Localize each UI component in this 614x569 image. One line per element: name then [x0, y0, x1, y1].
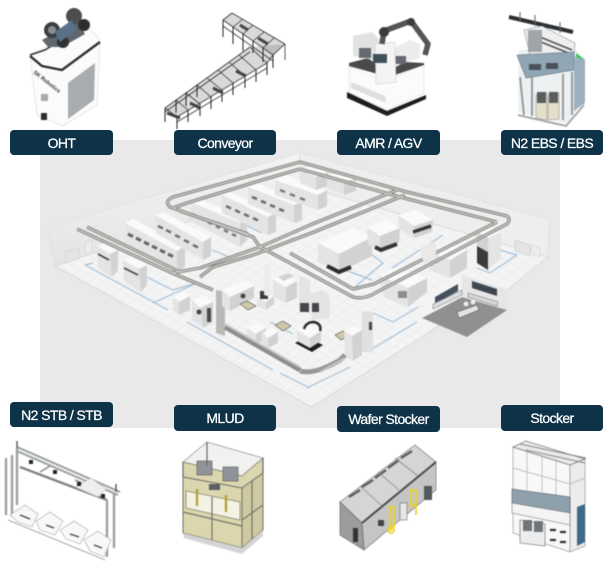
icon: N2 STB frame	[6, 441, 120, 560]
OHT drive unit	[42, 8, 90, 48]
label: N2 EBS / EBS: N2 EBS / EBS	[511, 135, 593, 151]
cabinet row C	[188, 200, 247, 247]
lower white boxes	[247, 323, 278, 348]
icon: OHT vehicle	[30, 8, 100, 126]
center left boxes	[173, 292, 213, 328]
label: AMR / AGV	[337, 130, 440, 155]
icon: Wafer Stocker	[340, 445, 436, 550]
robot unit	[295, 322, 323, 352]
tool box 2	[123, 257, 147, 292]
support pillar	[216, 290, 225, 336]
EBS top rail	[509, 17, 573, 32]
MLUD front face	[183, 477, 242, 548]
right wall	[300, 153, 549, 257]
right wall panels	[515, 240, 540, 257]
tool block far right	[430, 243, 467, 278]
icon: N2 EBS	[509, 12, 585, 126]
cabinet row A	[125, 219, 185, 273]
label: N2 STB / STB: N2 STB / STB	[21, 407, 102, 423]
tool block right	[378, 268, 427, 307]
tool box 1	[97, 243, 118, 277]
label: Wafer Stocker: Wafer Stocker	[348, 411, 429, 427]
robot arm	[382, 21, 428, 55]
label: Stocker	[501, 405, 603, 431]
floor AGV carts	[240, 301, 349, 340]
pillar block	[299, 276, 310, 314]
control room	[422, 275, 508, 337]
tool cluster 1	[367, 220, 400, 252]
green tab	[576, 53, 585, 68]
factory isometric floor plan	[48, 153, 549, 407]
overhead rail track	[77, 162, 509, 298]
label: Wafer Stocker	[337, 406, 440, 432]
stocker modules	[512, 489, 570, 525]
control room walls	[422, 275, 462, 318]
cabinet row D	[222, 192, 276, 235]
label: N2 EBS / EBS	[501, 130, 603, 155]
MLUD carriers	[197, 461, 238, 481]
label: N2 STB / STB	[10, 402, 113, 427]
OHT brand text: SK Robotics	[32, 70, 61, 95]
icon: Conveyor	[165, 13, 285, 129]
label: Conveyor	[174, 130, 276, 155]
large white block	[318, 228, 372, 272]
cabinet rows	[125, 166, 356, 273]
floor	[55, 185, 548, 407]
label: AMR / AGV: AMR / AGV	[355, 135, 422, 151]
dark machine	[477, 227, 501, 270]
background panel	[40, 140, 560, 428]
load ports	[536, 92, 559, 120]
icon: MLUD	[183, 442, 263, 554]
control room floor	[422, 297, 507, 337]
left wall panel	[65, 240, 92, 263]
process tools left	[97, 243, 147, 292]
back cabinets	[300, 166, 356, 195]
icon: Stocker	[512, 441, 586, 552]
label: MLUD: MLUD	[206, 410, 244, 426]
label: Stocker: Stocker	[530, 410, 574, 426]
center box	[222, 281, 254, 311]
label: MLUD	[174, 405, 276, 431]
EBS blue panel	[517, 52, 574, 78]
label: OHT	[10, 130, 113, 155]
cabinet row B	[155, 212, 211, 260]
cabinet row F	[275, 175, 327, 210]
dark machine near control room	[420, 242, 436, 264]
lower conveyor	[225, 324, 345, 372]
left wall	[48, 153, 300, 266]
center machines	[257, 263, 297, 310]
blue floor guide lines	[85, 225, 517, 388]
label: OHT: OHT	[48, 135, 75, 151]
icon: AMR robot	[347, 18, 428, 116]
storage trays	[10, 505, 111, 557]
cabinet row E	[248, 183, 302, 223]
monitors and desks	[433, 281, 498, 318]
right white unit and pillar	[310, 290, 373, 361]
tool cluster 2	[398, 210, 433, 238]
central tools	[173, 210, 501, 372]
label: Conveyor: Conveyor	[197, 135, 253, 151]
yellow handles	[388, 490, 416, 533]
